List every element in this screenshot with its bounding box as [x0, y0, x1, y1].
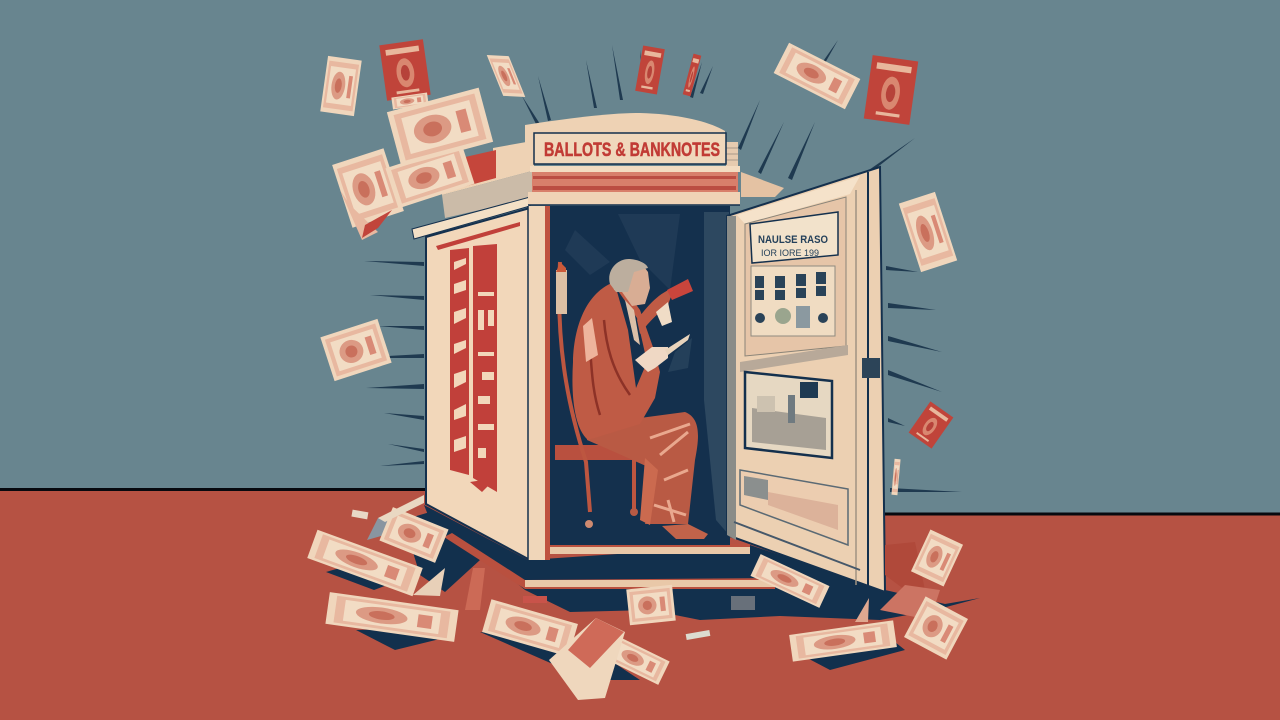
booth left side panel: [426, 208, 530, 560]
open door: [727, 167, 885, 592]
door lower panel: [734, 470, 860, 570]
door window panels: [751, 266, 835, 336]
platform: [444, 533, 775, 589]
banknotes on floor left: [307, 495, 547, 650]
floor horizon line: [0, 490, 1280, 514]
sign: Ballots and Banknotes: [534, 133, 726, 164]
banknote cluster top left: [332, 39, 496, 240]
door notice board: NAULSE RASO: [758, 234, 828, 246]
man reading ballot: [572, 259, 708, 539]
floating banknotes: [320, 43, 957, 495]
chair: [555, 262, 655, 528]
floor shadow under booth: [424, 505, 980, 620]
booth roof: [412, 113, 784, 239]
banknotes on floor centre: [480, 554, 830, 700]
shadow beside left floor notes: [403, 512, 480, 592]
floor: [0, 490, 1280, 720]
booth front pillar: [528, 206, 550, 560]
door notice board: IOR IORE 199: [761, 248, 819, 258]
door picture frame: [745, 372, 832, 458]
sign: Ballots and Banknotes: BALLOTS & BANKNOTES: [544, 140, 720, 161]
burst lines around booth: [352, 40, 962, 492]
booth interior: [550, 206, 730, 545]
door notice board: [750, 212, 838, 263]
banknotes on floor right: [789, 530, 968, 670]
